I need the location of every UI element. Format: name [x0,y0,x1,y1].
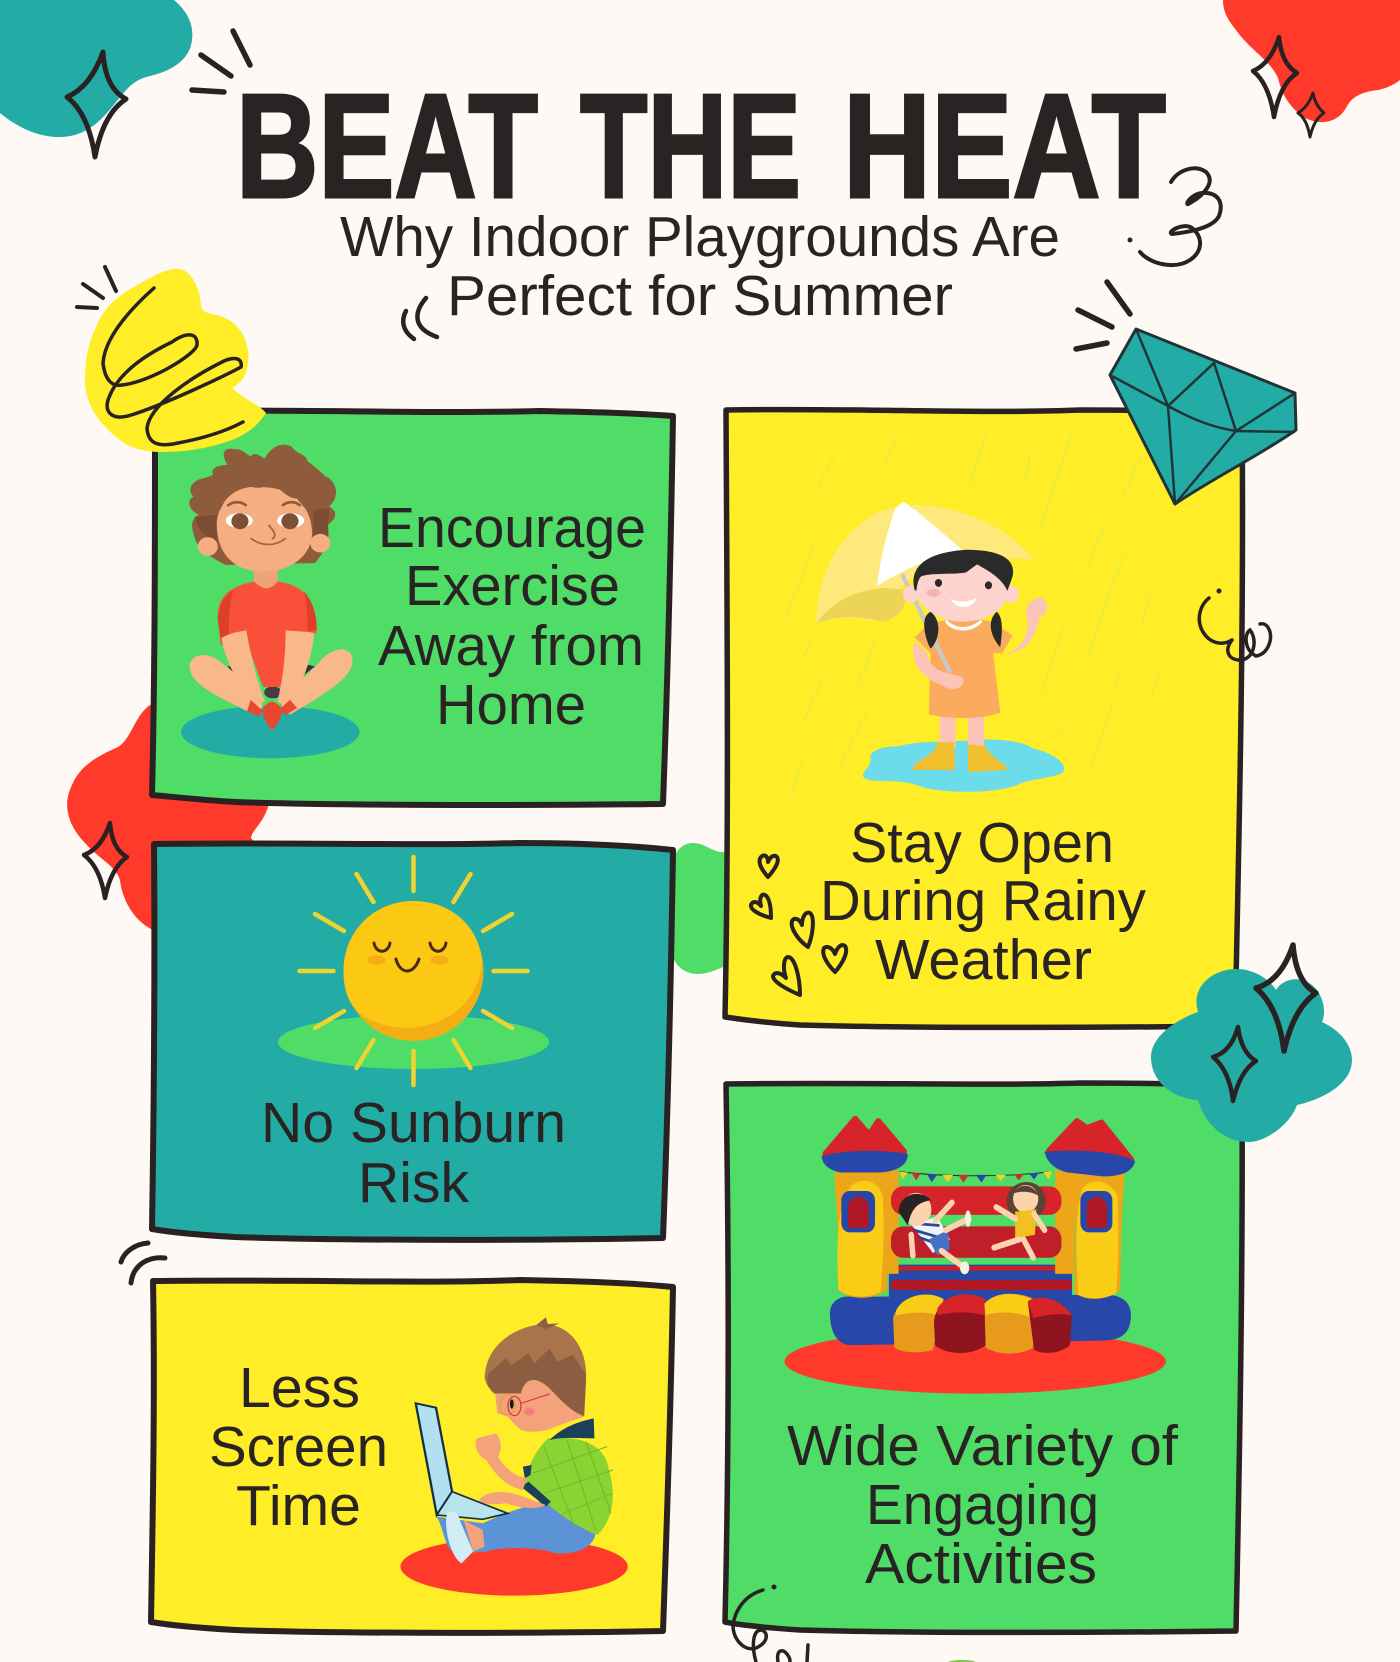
icon: sparkle top-left [67,52,126,157]
icon: double curve by subtitle [403,298,437,339]
title: THE [580,64,801,229]
blob: red middle-left [67,705,300,933]
icon: sparkles top-right [1253,37,1324,137]
blob: yellow with scribble [85,269,266,452]
text: no sunburn risk: No Sunburn [261,1091,566,1155]
text: stay open during rainy weather: During Rainy [820,869,1146,933]
title: HEAT [843,64,1166,229]
blob: teal top-left [0,0,192,137]
subtitle: Why Indoor Playgrounds Are [340,205,1060,269]
illustration: girl with umbrella in rain [786,436,1159,796]
subtitle [340,205,1060,328]
illustration: bouncy castle [784,1120,1166,1394]
text: stay open during rainy weather: Weather [875,928,1092,992]
text: less screen time [209,1356,388,1538]
blob: bottom edge sliver [946,1660,978,1662]
blob: teal cloud with sparkles [1151,945,1352,1142]
illustration: smiling sun [278,857,549,1085]
title [236,64,1166,229]
title: BEAT [236,64,538,229]
text: wide variety of engaging activities: Activities [865,1532,1097,1596]
text: encourage exercise away from home: Home [436,673,586,737]
illustration: boy with laptop [400,1317,628,1596]
text: wide variety of engaging activities [787,1414,1178,1596]
icon: squiggle on yellow panel edge [1199,588,1270,660]
icon: squiggle at bottom-left of green panel [733,1584,808,1662]
text: wide variety of engaging activities: Engaging [866,1473,1099,1537]
icon: curly squiggle by title [1128,168,1221,265]
text: encourage exercise away from home: Away from [378,614,644,678]
icon: hearts [751,855,846,995]
text: encourage exercise away from home: Encourage [378,496,646,560]
text: no sunburn risk [261,1091,566,1215]
icon: burst lines by title [192,31,250,92]
illustration: boy sitting [181,445,360,758]
text: less screen time: Screen [209,1415,388,1479]
text: encourage exercise away from home: Exercise [405,554,620,618]
text: less screen time: Less [239,1356,360,1420]
icon: curved marks above less screen time panel [121,1243,165,1283]
blob: red top-right [1223,0,1400,122]
icon: burst lines by yellow blob [77,267,116,308]
panel: less screen time [151,1280,673,1633]
text: less screen time: Time [236,1474,361,1538]
text: stay open during rainy weather [820,811,1146,992]
subtitle: Perfect for Summer [447,264,953,328]
blob: green between panels [672,843,740,974]
text: encourage exercise away from home [378,496,646,737]
text: no sunburn risk: Risk [358,1151,469,1215]
panel: no sunburn risk [152,843,673,1240]
panel: encourage exercise [152,411,673,805]
icon: burst lines by diamond [1076,282,1130,349]
text: stay open during rainy weather: Stay Open [850,811,1114,875]
icon: diamond [1110,329,1296,504]
panel: wide variety of engaging activities [725,1083,1242,1632]
illustration: kids jumping [899,1182,1046,1274]
text: wide variety of engaging activities: Wide Variety of [787,1414,1178,1478]
panel: stay open during rainy weather [725,410,1243,1027]
icon: sparkle middle-left [84,823,127,898]
